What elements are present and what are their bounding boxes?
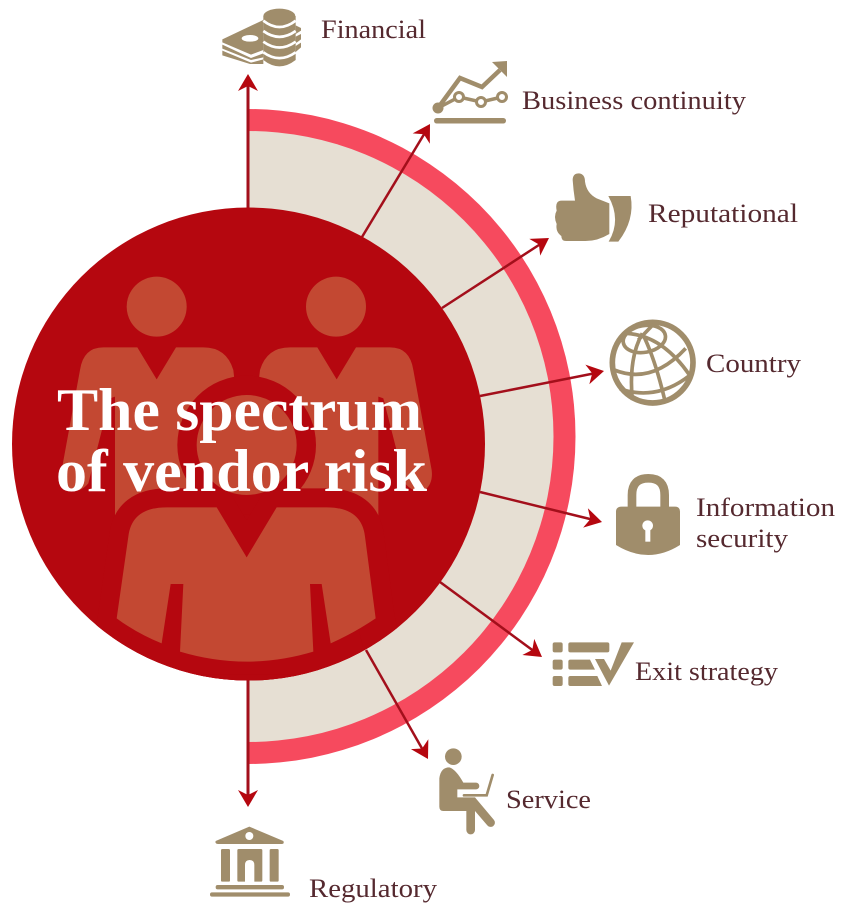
label: Country: Country <box>706 349 801 378</box>
item: reputational <box>555 173 798 242</box>
label: Information security: security <box>696 524 788 553</box>
person: left <box>61 277 247 522</box>
icon: three people <box>61 277 432 693</box>
arrow: exit strategy <box>440 582 548 665</box>
arrows <box>238 74 606 807</box>
title: of vendor risk <box>56 438 428 504</box>
item: financial <box>222 9 426 66</box>
arrow: financial <box>238 74 258 210</box>
item: service <box>439 748 591 834</box>
half ring: spectrum band <box>248 109 576 764</box>
icon: list and check <box>553 642 634 686</box>
central circle <box>12 208 485 693</box>
item: country <box>612 322 801 403</box>
icon: thumbs up <box>555 173 632 242</box>
label: Financial: Financial <box>321 15 426 44</box>
person: right <box>247 277 432 522</box>
label: Information security <box>696 493 835 553</box>
icon: padlock <box>616 478 680 555</box>
label: Business continuity: Business continuity <box>522 86 746 115</box>
arrow: country <box>480 361 606 396</box>
arrow: service <box>366 650 437 764</box>
person: centre <box>100 376 393 693</box>
title: The spectrum <box>57 377 422 443</box>
arrow: regulatory <box>238 678 258 807</box>
item: information security <box>616 478 835 555</box>
icon: line chart <box>432 61 507 124</box>
item: regulatory <box>210 827 437 903</box>
arrow: business continuity <box>362 119 439 237</box>
icon: globe <box>612 322 693 403</box>
item: business continuity <box>432 61 746 124</box>
icon: person with laptop <box>439 748 495 834</box>
arrow: information security <box>480 492 604 532</box>
title <box>56 377 428 504</box>
label: Regulatory: Regulatory <box>309 874 437 903</box>
label: Reputational: Reputational <box>648 199 798 228</box>
label: Service: Service <box>506 785 591 814</box>
arrow: reputational <box>442 230 554 308</box>
icon: money and coins <box>222 9 301 66</box>
label: Exit strategy: Exit strategy <box>635 657 778 686</box>
icon: bank building <box>210 827 290 897</box>
label: Information security: Information <box>696 493 835 522</box>
item: exit strategy <box>553 642 778 686</box>
